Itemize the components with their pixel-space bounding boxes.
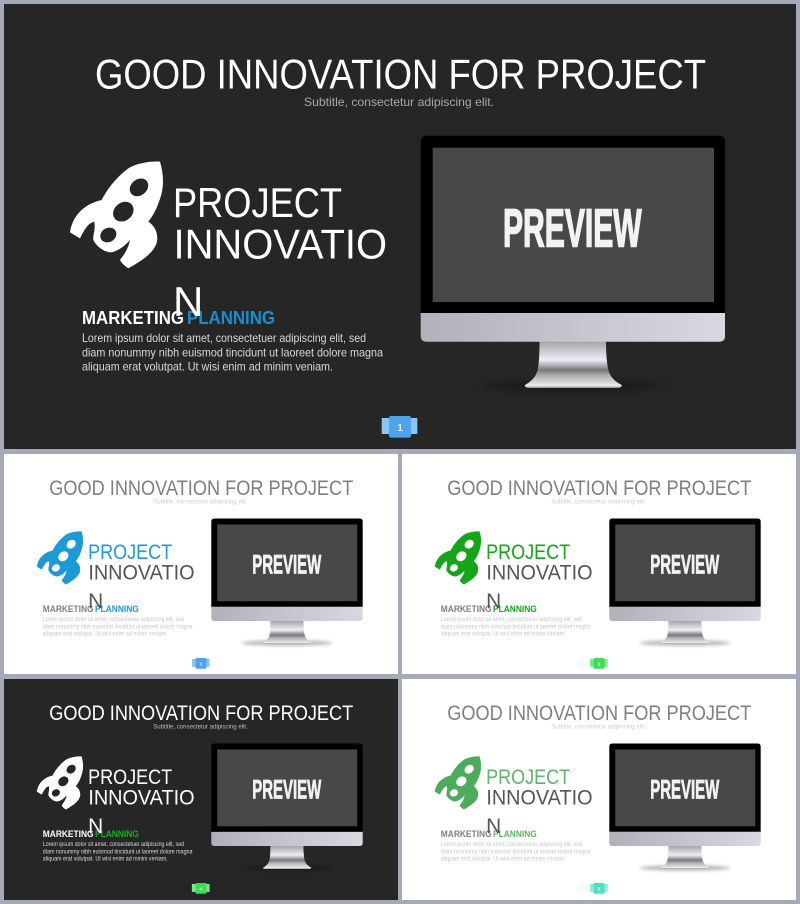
heading: marketing planning: PLANNING (95, 829, 139, 839)
preview label: PREVIEW (650, 550, 720, 580)
heading: marketing planning: MARKETING (43, 829, 94, 839)
heading: marketing planning (441, 829, 537, 839)
icon: rocket (37, 531, 83, 584)
logo text: INNOVATIO (88, 787, 195, 810)
page badge: 1 (397, 423, 403, 434)
body text: diam nonummy nibh euismod tincidunt ut laoreet dolore magna (441, 849, 591, 855)
monitor mockup (609, 744, 761, 871)
monitor mockup (609, 519, 761, 646)
page badge (382, 416, 417, 438)
logo text: PROJECT (88, 541, 172, 564)
panel: main dark slide (4, 4, 796, 449)
body text: diam nonummy nibh euismod tincidunt ut laoreet dolore magna (43, 624, 193, 630)
logo text: PROJECT (486, 541, 570, 564)
logo text: N (88, 815, 103, 838)
icon: rocket (435, 756, 481, 809)
logo text: N (486, 815, 501, 838)
body text: Lorem ipsum dolor sit amet, consectetuer adipiscing elit, sed (82, 331, 366, 345)
logo text: PROJECT (88, 766, 172, 789)
logo text: INNOVATIO (88, 562, 195, 585)
logo text (88, 541, 195, 613)
page badge (192, 658, 210, 669)
subtitle: Subtitle, consectetur adipiscing elit. (304, 95, 494, 109)
logo text: N (173, 278, 203, 325)
logo text: PROJECT (486, 766, 570, 789)
title: GOOD INNOVATION FOR PROJECT (447, 702, 751, 725)
logo text: INNOVATIO (174, 220, 387, 267)
body text: diam nonummy nibh euismod tincidunt ut laoreet dolore magna (441, 624, 591, 630)
body text (441, 842, 591, 862)
monitor mockup (211, 519, 363, 646)
page badge: 5 (598, 886, 601, 892)
heading: marketing planning: MARKETING (441, 604, 492, 614)
title: GOOD INNOVATION FOR PROJECT (49, 702, 353, 725)
page badge: 3 (598, 661, 601, 667)
panel: white slide, blue theme (4, 454, 398, 674)
heading: marketing planning: PLANNING (95, 604, 139, 614)
logo text (486, 766, 593, 838)
heading: marketing planning (43, 829, 139, 839)
title: GOOD INNOVATION FOR PROJECT (95, 50, 706, 98)
subtitle: Subtitle, consectetur adipiscing elit. (551, 500, 646, 506)
body text: aliquam erat volutpat. Ut wisi enim ad minim veniam. (441, 631, 566, 637)
body text: Lorem ipsum dolor sit amet, consectetuer adipiscing elit, sed (43, 842, 184, 848)
heading: marketing planning: PLANNING (187, 308, 275, 328)
logo text: N (88, 590, 103, 613)
heading: marketing planning (82, 308, 275, 328)
icon: rocket (70, 162, 163, 268)
subtitle: Subtitle, consectetur adipiscing elit. (153, 500, 248, 506)
body text: aliquam erat volutpat. Ut wisi enim ad minim veniam. (82, 360, 333, 374)
body text: Lorem ipsum dolor sit amet, consectetuer adipiscing elit, sed (43, 617, 184, 623)
page badge (590, 883, 608, 894)
preview label: PREVIEW (503, 199, 642, 259)
body text: aliquam erat volutpat. Ut wisi enim ad minim veniam. (43, 856, 168, 862)
page badge: 2 (200, 661, 203, 667)
preview label: PREVIEW (252, 775, 322, 805)
title: GOOD INNOVATION FOR PROJECT (49, 477, 353, 500)
heading: marketing planning (43, 604, 139, 614)
body text (82, 331, 383, 374)
heading: marketing planning: MARKETING (441, 829, 492, 839)
logo text (486, 541, 593, 613)
heading: marketing planning: MARKETING (82, 308, 184, 328)
icon: rocket (37, 756, 83, 809)
preview label: PREVIEW (252, 550, 322, 580)
heading: marketing planning: PLANNING (493, 829, 537, 839)
heading: marketing planning: MARKETING (43, 604, 94, 614)
body text: diam nonummy nibh euismod tincidunt ut laoreet dolore magna (82, 346, 383, 360)
panel: dark slide, green accent (4, 679, 398, 900)
heading: marketing planning (441, 604, 537, 614)
title: GOOD INNOVATION FOR PROJECT (447, 477, 751, 500)
body text: aliquam erat volutpat. Ut wisi enim ad minim veniam. (43, 631, 168, 637)
body text: Lorem ipsum dolor sit amet, consectetuer adipiscing elit, sed (441, 842, 582, 848)
logo text: PROJECT (173, 179, 342, 226)
panel: white slide, green theme (402, 454, 796, 674)
body text (43, 842, 193, 862)
logo text: INNOVATIO (486, 787, 593, 810)
subtitle: Subtitle, consectetur adipiscing elit. (551, 725, 646, 731)
logo text (88, 766, 195, 838)
heading: marketing planning: PLANNING (493, 604, 537, 614)
body text: diam nonummy nibh euismod tincidunt ut laoreet dolore magna (43, 849, 193, 855)
page badge (590, 658, 608, 669)
body text: aliquam erat volutpat. Ut wisi enim ad minim veniam. (441, 856, 566, 862)
panel: white slide, soft green theme (402, 679, 796, 900)
subtitle: Subtitle, consectetur adipiscing elit. (153, 725, 248, 731)
logo text (173, 179, 387, 325)
icon: rocket (435, 531, 481, 584)
logo text: N (486, 590, 501, 613)
monitor mockup (211, 744, 363, 871)
body text: Lorem ipsum dolor sit amet, consectetuer adipiscing elit, sed (441, 617, 582, 623)
logo text: INNOVATIO (486, 562, 593, 585)
page badge: 4 (200, 886, 203, 892)
monitor mockup (421, 136, 725, 391)
body text (441, 617, 591, 637)
page badge (192, 883, 210, 894)
preview label: PREVIEW (650, 775, 720, 805)
body text (43, 617, 193, 637)
